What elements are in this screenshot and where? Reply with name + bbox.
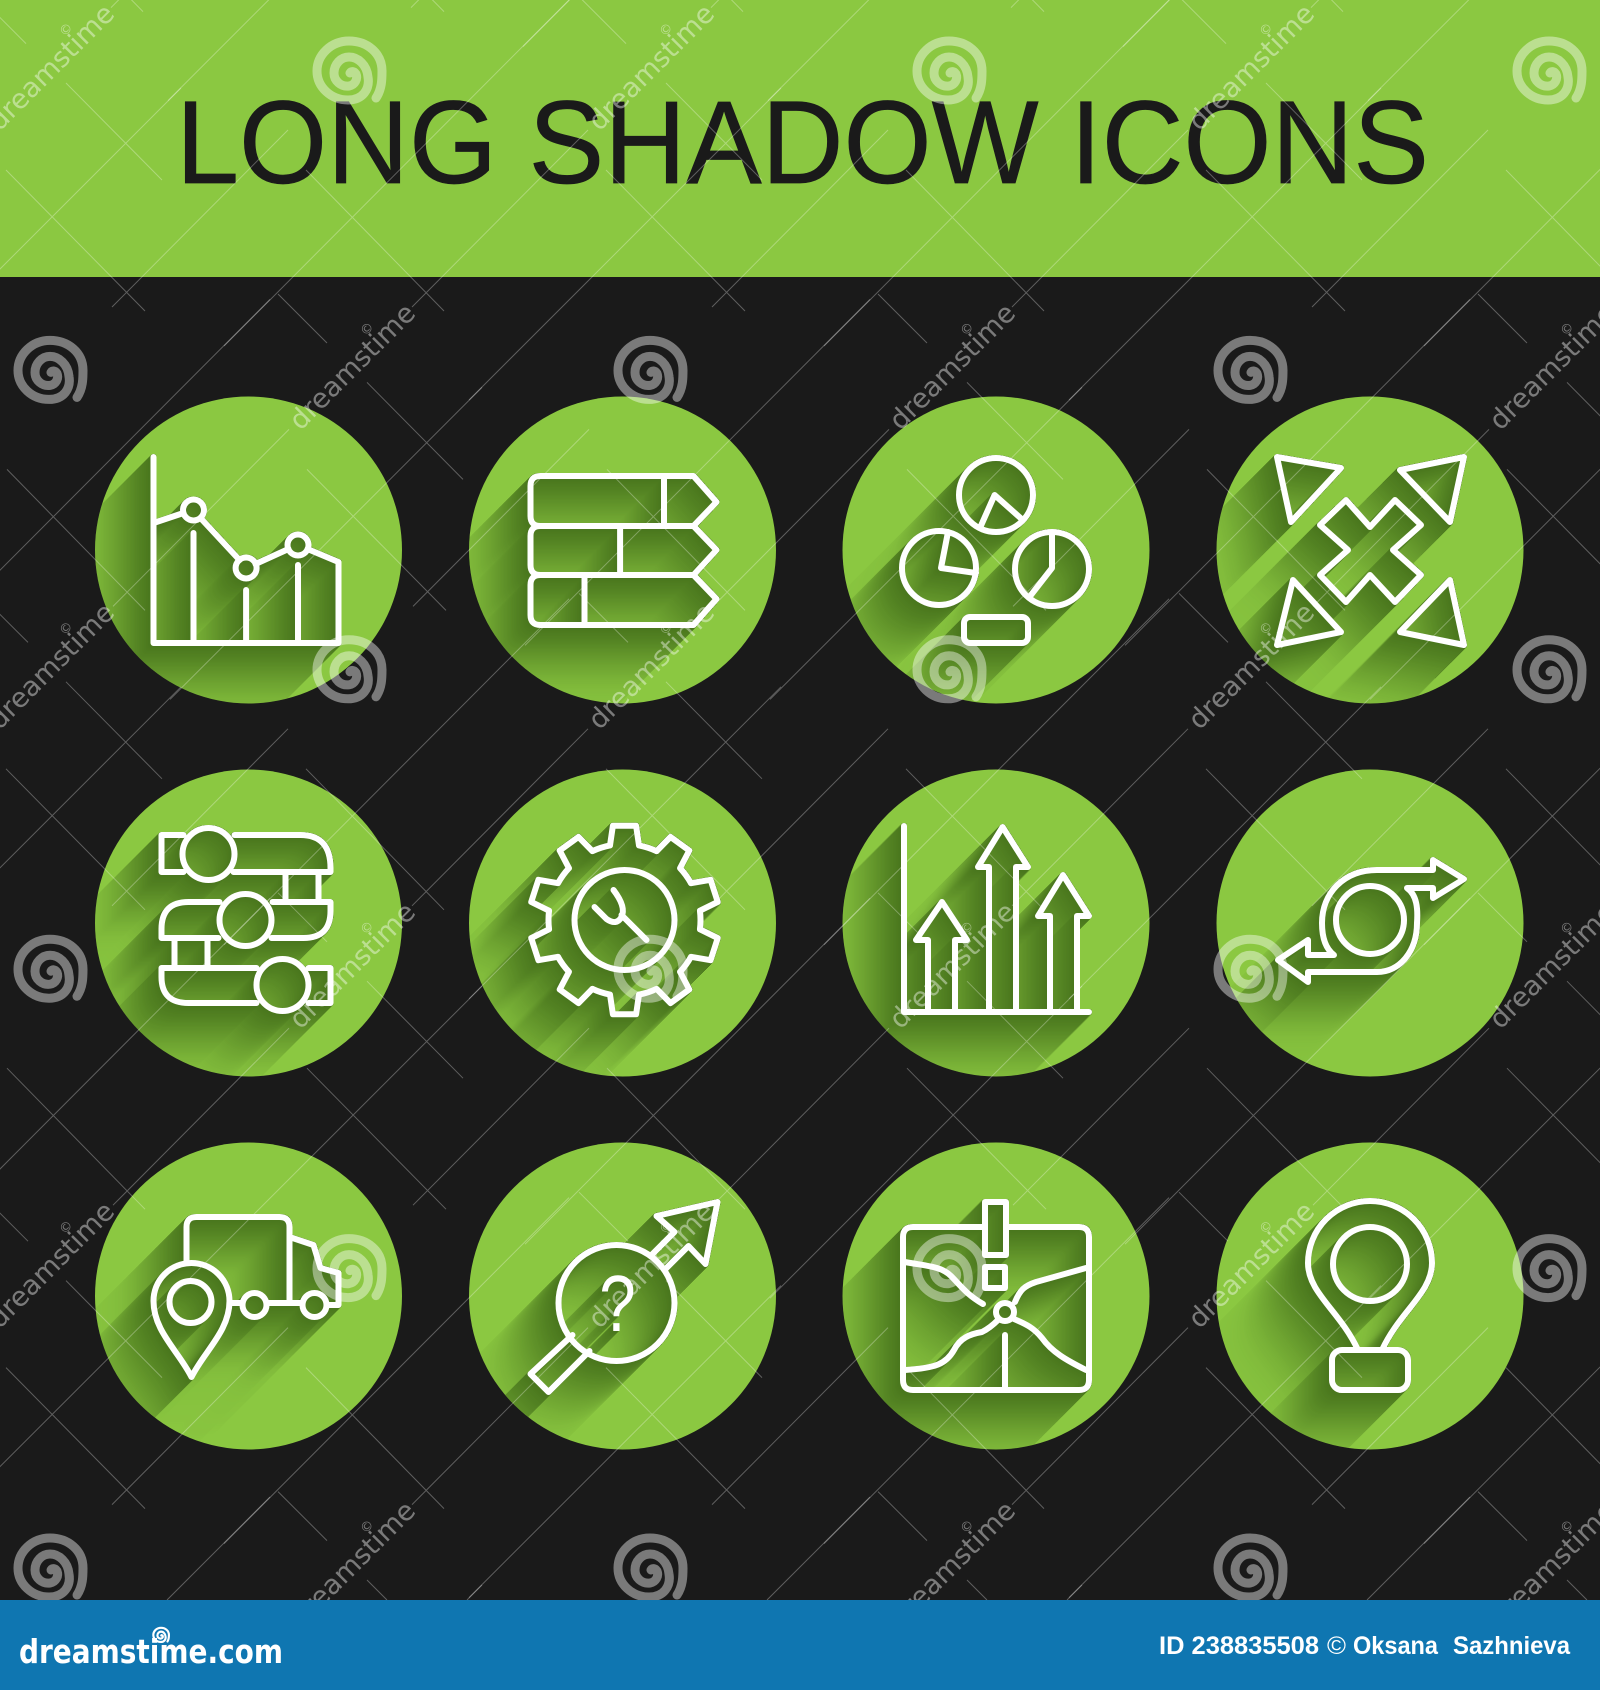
badge: gear [469, 770, 776, 1076]
green circle [469, 1142, 776, 1450]
badge: search [469, 1142, 776, 1450]
badge: delivery [95, 1142, 402, 1450]
icon: line chart [154, 457, 338, 643]
icon: magnifier with question mark and arrow [530, 1202, 718, 1392]
green circle [95, 1142, 402, 1450]
footer credit: ID 238835508 [1159, 1632, 1319, 1660]
icon: magnifier with question mark and arrow: ? [599, 1259, 636, 1348]
title: LONG SHADOW ICONS [176, 77, 1429, 209]
green circle [1216, 770, 1524, 1076]
footer bar [0, 1600, 1600, 1690]
green circle [469, 770, 776, 1076]
icon: three pie charts and label [902, 458, 1089, 643]
icon: three segmented arrow bars [530, 476, 716, 625]
green circle [95, 770, 402, 1076]
badge: sliders [95, 770, 402, 1076]
footer logo: dreamstime.com [19, 1632, 283, 1671]
icon: cross with four triangles [1277, 457, 1464, 645]
icon: map pin on base [1308, 1201, 1432, 1390]
icon: truck and map pin [154, 1217, 338, 1377]
badge: pie charts [842, 396, 1150, 704]
badge: expanding arrows [1216, 396, 1524, 704]
badge: direction loop [1216, 770, 1524, 1076]
badge: location pin [1216, 1142, 1524, 1450]
icon: gear with wrench [525, 825, 724, 1015]
footer credit: Sazhnieva [1453, 1632, 1571, 1660]
icon: pipe sliders [162, 828, 330, 1011]
badge: line chart [95, 396, 402, 704]
badge: arrow bars [469, 396, 776, 704]
footer credit: © [1327, 1632, 1347, 1660]
badge: growth arrows [842, 770, 1150, 1076]
green circle [1216, 1142, 1524, 1450]
green circle [469, 396, 776, 704]
footer credit: Oksana [1353, 1632, 1439, 1660]
green circle [842, 770, 1150, 1076]
green circle [842, 396, 1150, 704]
badge: map alert [842, 1142, 1150, 1450]
green circle [1216, 396, 1524, 704]
footer credit [1159, 1632, 1571, 1660]
icon: loop with two arrows [1278, 860, 1464, 982]
green circle [95, 396, 402, 704]
green circle [842, 1142, 1150, 1450]
icon: road map with exclamation mark [903, 1202, 1089, 1390]
header band [0, 0, 1600, 277]
icon: rising arrow chart [904, 826, 1089, 1012]
